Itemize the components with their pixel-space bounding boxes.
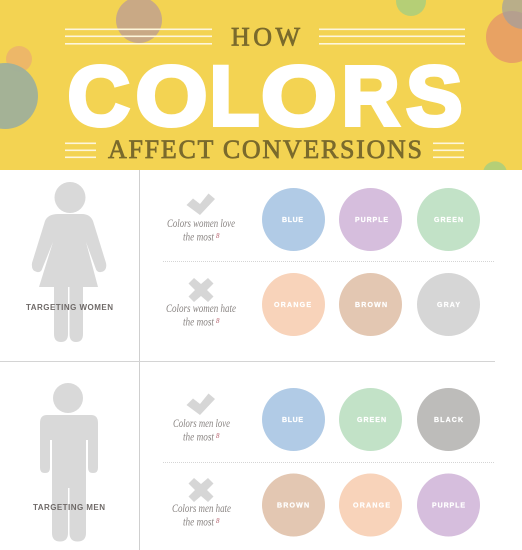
caption [172, 503, 231, 528]
heading: colors [68, 49, 462, 143]
top rules [65, 28, 465, 45]
heading: colors: O [261, 49, 337, 143]
color circles: BROWN [277, 502, 309, 510]
heading: affect conversions: AFFECT CONVERSIONS [108, 135, 422, 164]
color circles: ORANGE [274, 302, 311, 309]
color circles [262, 474, 480, 536]
panel: targeting women [26, 182, 113, 342]
row: women love [167, 188, 480, 251]
caption: Colors women love [167, 218, 235, 230]
color circles: BLUE [282, 417, 303, 424]
icon: cross [188, 478, 214, 502]
color circles: BLACK [434, 417, 463, 424]
panel: targeting men [33, 383, 105, 542]
heading: colors: C [68, 49, 130, 143]
caption: the most [183, 432, 215, 444]
caption: 8 [216, 317, 220, 325]
label: targeting women: TARGETING WOMEN [26, 303, 113, 312]
caption: the most [183, 232, 215, 244]
caption: 8 [216, 232, 220, 240]
color circles: BLUE [282, 217, 303, 224]
heading: colors: R [342, 49, 400, 143]
color circles: GRAY [437, 302, 460, 309]
icon: man figure [40, 383, 98, 542]
icon: check [186, 394, 215, 415]
row: men hate [172, 474, 480, 536]
caption [166, 303, 236, 328]
icon: check [186, 194, 215, 215]
caption: 8 [216, 517, 220, 525]
heading: how: HOW [231, 22, 300, 52]
caption: Colors women hate [166, 303, 236, 315]
caption [167, 218, 235, 244]
icon: cross [188, 278, 214, 302]
header banner [0, 0, 522, 170]
caption: Colors men hate [172, 503, 231, 515]
row: men love [173, 388, 480, 451]
caption: 8 [216, 432, 220, 440]
color circles [262, 273, 480, 336]
color circles: PURPLE [432, 502, 465, 510]
color circles: GREEN [357, 417, 386, 424]
color circles: PURPLE [355, 217, 388, 224]
heading: colors: S [406, 49, 462, 143]
caption: Colors men love [173, 418, 230, 430]
bottom rules [65, 142, 464, 158]
color circles: GREEN [434, 217, 463, 224]
caption: the most [183, 516, 215, 528]
color circles: ORANGE [353, 502, 390, 510]
color circles: BROWN [355, 302, 387, 309]
decorative bubbles [0, 0, 522, 170]
row: women hate [166, 273, 480, 336]
icon: woman figure [32, 182, 106, 342]
label: targeting men: TARGETING MEN [33, 503, 105, 512]
color circles [262, 388, 480, 451]
caption: the most [183, 316, 215, 328]
heading: colors: O [136, 49, 208, 143]
heading: colors: L [210, 49, 259, 143]
column and row dividers [0, 170, 495, 550]
caption [173, 418, 230, 444]
color circles [262, 188, 480, 251]
